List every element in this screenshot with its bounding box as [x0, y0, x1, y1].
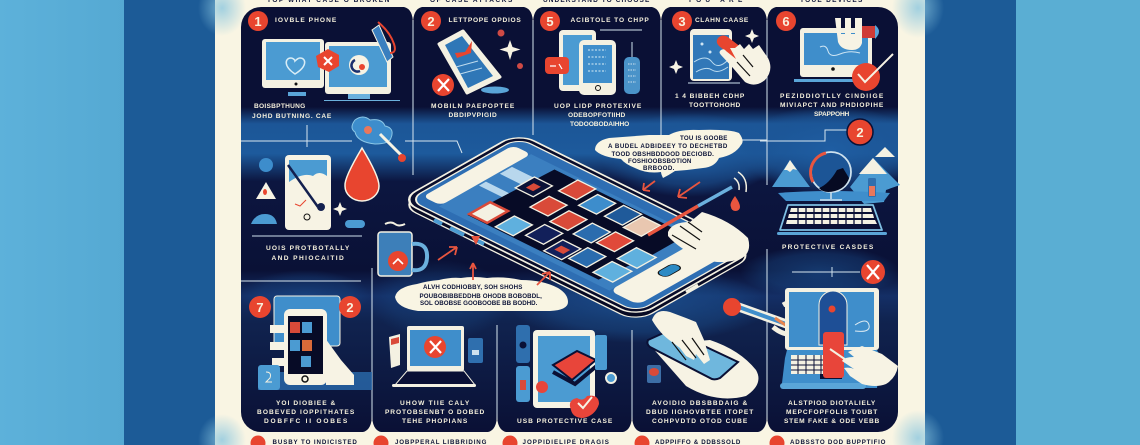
- text block bottom 2: UHOW TIIE CALY: [400, 400, 470, 407]
- text block 2: MOBILN PAEPOPTEE: [431, 103, 515, 110]
- icon: small symbols: [251, 158, 365, 228]
- text block 3: [554, 103, 642, 128]
- text block 6: UOIS PROTBOTALLY: [266, 245, 350, 252]
- callout text: BRBOOD.: [643, 165, 675, 172]
- panel: bottom 4, hand on phone: [646, 311, 758, 425]
- phone body: [400, 133, 755, 317]
- text block bottom 5: MEPCFOPFOLIS TOUBT: [786, 409, 878, 416]
- mug: [258, 365, 280, 390]
- icon: red badge number 2: [847, 119, 873, 145]
- blue glow areas: [240, 105, 920, 343]
- globe: [811, 152, 851, 200]
- panel notches: [363, 7, 776, 432]
- text block 3: UOP LIDP PROTEXIVE: [554, 103, 642, 110]
- background: right dark blue stripe: [925, 0, 1016, 445]
- text block 1: [252, 103, 332, 120]
- cream bottom strip: [609, 237, 732, 305]
- text block 5: [780, 93, 884, 118]
- app tiles: [469, 167, 693, 284]
- panel: bottom 1, phone in hand: [249, 296, 372, 425]
- footer item 5: [770, 436, 886, 445]
- text block 4: TOOTTOHOHD: [689, 102, 741, 109]
- footer item 4: [634, 436, 741, 445]
- callout text: [608, 135, 728, 172]
- icon: overlapping tablets: [559, 30, 642, 95]
- icon: red badge number 2: 2: [856, 125, 864, 140]
- footer row: [250, 436, 886, 445]
- hand: [270, 325, 354, 385]
- small red icon: [647, 365, 661, 383]
- text block bottom 5: [784, 400, 880, 425]
- number badge 2: 2: [427, 14, 435, 29]
- illustration: globe and mountains: [772, 147, 900, 204]
- stylus red part: [648, 206, 698, 235]
- stick: [830, 349, 846, 360]
- icon: red triangle pointer: [471, 236, 480, 245]
- phone port: [686, 285, 698, 292]
- text block 3: TODOOBODAIHHO: [570, 121, 630, 128]
- stylus blue part: [698, 187, 732, 206]
- callout text: A BUDEL ADBIDEEY TO DECHETBD: [608, 143, 728, 150]
- tilted phone: [647, 330, 738, 379]
- text block 5: SPAPPOHH: [814, 111, 850, 118]
- icon: pointing hand with red cloth: [717, 36, 770, 85]
- red cross: [424, 336, 446, 358]
- text block 3: ODEBOPFOTIIHD: [568, 112, 626, 119]
- phone side shadow: [400, 138, 755, 322]
- callout text: TOOD OBSHBDDOOD DECIOBD.: [612, 151, 714, 158]
- icon: tilted tablet: [439, 31, 509, 94]
- heading 2: LETTPOPE OPDIOS: [448, 17, 522, 24]
- background: left dark blue stripe: [124, 0, 215, 445]
- background: left light blue side: [0, 0, 124, 445]
- bottom callout text: ALVH CODHIOBBY, SOH SHOHS: [423, 284, 523, 291]
- text block 5: MIVIAPCT AND PHDIOPIHE: [780, 102, 884, 109]
- icon: tablet with map: [688, 29, 740, 83]
- background: right light blue side: [1016, 0, 1140, 445]
- icon: red drop on stylus: [730, 196, 740, 211]
- text block 6: [252, 236, 362, 262]
- text block 6: AND PHIOCAITID: [272, 255, 344, 262]
- panel: top 5, laptop: [776, 11, 893, 118]
- text block 4: 1 4 BIBBEH CDHP: [675, 93, 745, 100]
- blue backing: [274, 296, 340, 346]
- icon: red cross circle: [432, 74, 454, 96]
- cream stand: [650, 340, 758, 398]
- cream speaker strip: [423, 145, 531, 205]
- check badge: [570, 396, 599, 418]
- text block 5: PEZIDDIOTLLY CINDIIGE: [780, 93, 884, 100]
- heading 3: ACIBTOLE TO CHPP: [570, 17, 650, 24]
- bottom callout text: [420, 284, 542, 307]
- panel: top 2, tablet: [421, 11, 523, 119]
- text block bottom 1: DOBFFC II OOBES: [264, 418, 348, 425]
- icon: laptop: [794, 28, 872, 82]
- callout text: TOU IS GOOBE: [680, 135, 728, 142]
- panel: top 3, tablets: [540, 11, 650, 128]
- icon: mug: [378, 222, 427, 276]
- icon: pen clip: [372, 22, 395, 62]
- icon: keyboard: [777, 205, 887, 235]
- icon: red tag: [545, 57, 569, 74]
- hand: [842, 346, 898, 386]
- phone with tiles: [284, 309, 327, 385]
- laptop: [392, 326, 476, 387]
- bottom callout text: SOL OBOBSE GOOBOOBE BB BODHD.: [420, 300, 538, 307]
- light stripes: [479, 167, 535, 197]
- cream page: [198, 0, 944, 445]
- footer item 2: [374, 436, 487, 445]
- number badge 5: 5: [546, 14, 554, 29]
- text block 2: DBDIPVPIGID: [448, 112, 498, 119]
- red case: [536, 351, 599, 393]
- text block bottom 3: USB PROTECTIVE CASE: [517, 418, 613, 425]
- base band: [258, 372, 372, 390]
- clipped top headings: [267, 0, 863, 4]
- number badge 3: 3: [678, 14, 686, 29]
- text block bottom 4: [646, 400, 754, 425]
- bottom callout text: POUBOBIBBEDDHB OHODB BOBOBDL,: [420, 293, 542, 300]
- footer item 1: [250, 436, 358, 445]
- icon: red water drop: [345, 148, 379, 201]
- icon: remote device: [624, 42, 640, 94]
- panel dividers: [241, 20, 860, 420]
- icon: red check circle: [852, 54, 893, 91]
- number badge 6: 6: [782, 14, 790, 29]
- arch on screen: [819, 291, 869, 345]
- main phone illustration: [400, 133, 755, 322]
- red phone: [823, 332, 844, 378]
- text block bottom 2: [385, 400, 485, 425]
- icon: sparkles: [669, 29, 759, 74]
- panel: bottom right, laptop with phone: [780, 288, 898, 425]
- icon: cream phone with stylus: [285, 155, 331, 230]
- panel: mid left, phone and drop: [251, 148, 379, 262]
- text block bottom 4: DBUD IIGHOVBTEE ITOPET: [646, 409, 754, 416]
- icon: cloud with thermometer: [352, 117, 406, 162]
- mountain caps: [784, 147, 895, 174]
- text block bottom 5: STEM FAKE & ODE VEBB: [784, 418, 880, 425]
- bottle and ring: [595, 335, 616, 383]
- badge 2: 2: [346, 300, 354, 315]
- panel: bottom 2, laptop: [385, 326, 485, 425]
- small bottle: [868, 178, 876, 197]
- footer item 3: [502, 436, 610, 445]
- stylus waves: [734, 172, 746, 192]
- icon: hook cable: [723, 298, 805, 334]
- badge 7: 7: [256, 300, 264, 315]
- screen light base: [439, 154, 701, 291]
- side buttons: [434, 220, 484, 244]
- panel: bottom 3, tablet case: [516, 325, 616, 425]
- text block bottom 2: TEHE PHOPIANS: [402, 418, 468, 425]
- text block 4: [675, 93, 745, 109]
- text block bottom 1: [257, 400, 355, 425]
- text block bottom 4: COHPVDTD OTOD CUBE: [652, 418, 748, 425]
- text block 1: BOISBPTHUNG: [254, 103, 306, 110]
- text block bottom 4: AVOIDIO DBSBBDAIG &: [652, 400, 748, 407]
- mountains: [772, 158, 900, 204]
- number badge 1: [248, 11, 268, 31]
- text block 1: JOHD BUTNING. CAE: [252, 113, 332, 120]
- icon: red cross circle right: [832, 260, 885, 284]
- heading 1: IOVBLE PHONE: [275, 17, 337, 24]
- text block bottom 1: YOI DIOBIEE &: [276, 400, 336, 407]
- number badge 1: 1: [254, 14, 262, 29]
- icon: sparkle and dots: [498, 30, 523, 69]
- finger lines: [672, 222, 702, 249]
- panel: top 1, double monitor: [248, 11, 400, 120]
- finger lines: [672, 338, 704, 360]
- icon: left monitor: [262, 39, 324, 96]
- callout text: FOSHIOOBSBOTION: [628, 158, 692, 165]
- icon: red warning hexagon: [316, 49, 339, 72]
- text block bottom 2: PROTOBSENBT O DOBED: [385, 409, 485, 416]
- small devices: [516, 325, 530, 402]
- heading: protective cases: PROTECTIVE CASDES: [782, 244, 874, 251]
- hand: [652, 311, 710, 364]
- tablet: [533, 330, 595, 408]
- laptop base with keys: [780, 350, 881, 389]
- blue pill button: [656, 263, 683, 278]
- hand on phone: [668, 212, 749, 262]
- heading 4: CLAHN CAASE: [695, 17, 749, 24]
- phone blue frame: [409, 138, 746, 312]
- text block 2: [431, 103, 515, 119]
- callout: top: [595, 130, 743, 178]
- black screen region: [468, 168, 687, 282]
- laptop screen: [785, 288, 879, 350]
- callout: bottom: [395, 277, 568, 311]
- book and device: [389, 334, 483, 368]
- main dark panel: [241, 7, 898, 432]
- panel: top 4, clean case: [669, 11, 770, 109]
- text block bottom 1: BOBEVED IOPPITHATES: [257, 409, 355, 416]
- phone screen: [421, 144, 732, 305]
- icon: hand from top: [835, 18, 879, 50]
- text block bottom 5: ALSTPIOD DIOTALIELY: [788, 400, 876, 407]
- icon: right monitor: [324, 42, 400, 101]
- arrows: red pointers: [438, 181, 700, 285]
- water base: [778, 191, 890, 201]
